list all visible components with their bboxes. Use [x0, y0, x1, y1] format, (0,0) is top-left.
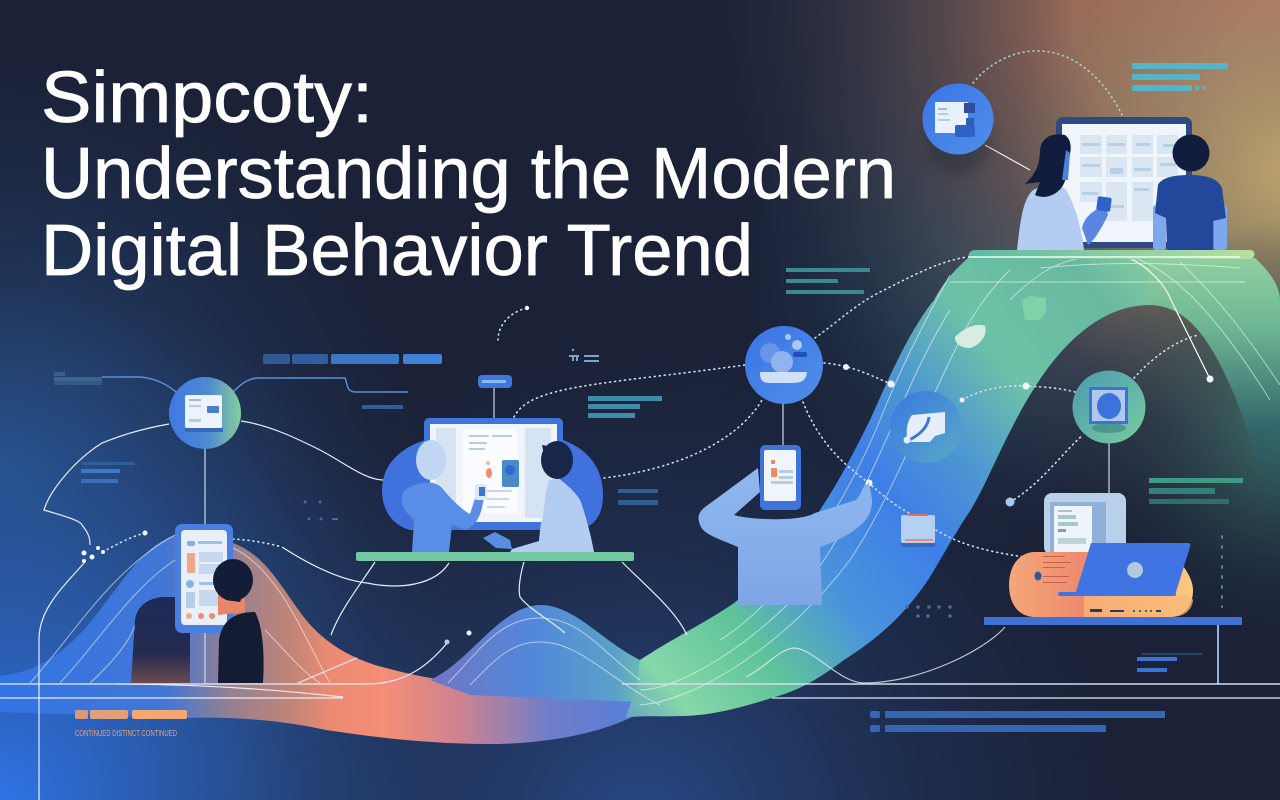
label bars: right green	[1149, 478, 1243, 504]
wave: second hump	[430, 605, 680, 702]
man	[1153, 134, 1227, 250]
label bars: orange: CONTINUED DISTINCT CONTINUED	[75, 729, 177, 738]
dotted paths	[103, 51, 1222, 607]
label bars: orange	[75, 710, 187, 738]
node: food bowl	[745, 326, 823, 404]
floating icons on ribbon	[955, 296, 1046, 348]
pill label	[478, 375, 512, 388]
package card	[901, 514, 935, 547]
wave: orange blue band with left hump	[0, 534, 650, 744]
label bars: bottom centre	[870, 711, 1165, 732]
blue table	[984, 617, 1242, 625]
dot markers	[82, 306, 1214, 644]
top monitor scene	[1017, 117, 1227, 250]
person left	[402, 440, 487, 552]
dark seated body	[131, 597, 190, 683]
title: Simpcoty:	[41, 58, 373, 138]
person	[698, 468, 872, 605]
wave: rising ribbon	[625, 258, 1150, 718]
top platform	[968, 250, 1254, 259]
ribbon contour lines	[30, 253, 1280, 705]
wave: ribbon right leg	[1148, 258, 1280, 560]
small symbol and bars	[569, 349, 599, 362]
monitor	[424, 418, 563, 528]
woman	[1017, 134, 1112, 250]
label bars: lower right	[1137, 653, 1202, 672]
label bars: top left	[54, 354, 442, 483]
phone	[760, 445, 801, 510]
node: document	[169, 377, 241, 449]
platform highlight	[968, 256, 1240, 258]
node: framed picture	[1072, 370, 1146, 444]
green table	[356, 552, 634, 561]
title	[41, 58, 896, 291]
laptop workstation	[984, 493, 1242, 625]
title: Digital Behavior Trend	[41, 211, 753, 291]
laptop	[1058, 543, 1190, 596]
tablet	[1044, 493, 1126, 555]
small dots	[304, 500, 952, 618]
centre person with phone	[698, 445, 872, 605]
blue connector lines	[102, 377, 408, 392]
central monitor scene	[356, 418, 634, 561]
label bars: centre right	[588, 268, 870, 505]
title: Understanding the Modern	[41, 134, 896, 214]
node: top dashboard	[922, 84, 994, 174]
orange base	[1009, 552, 1193, 617]
monitor	[1056, 117, 1192, 248]
phone	[175, 524, 233, 633]
label bars: top right	[1132, 63, 1228, 91]
node: chat card	[890, 391, 962, 463]
person right	[483, 441, 594, 552]
person	[213, 559, 264, 683]
left person with phone	[131, 524, 264, 683]
blue backdrop	[382, 440, 603, 530]
